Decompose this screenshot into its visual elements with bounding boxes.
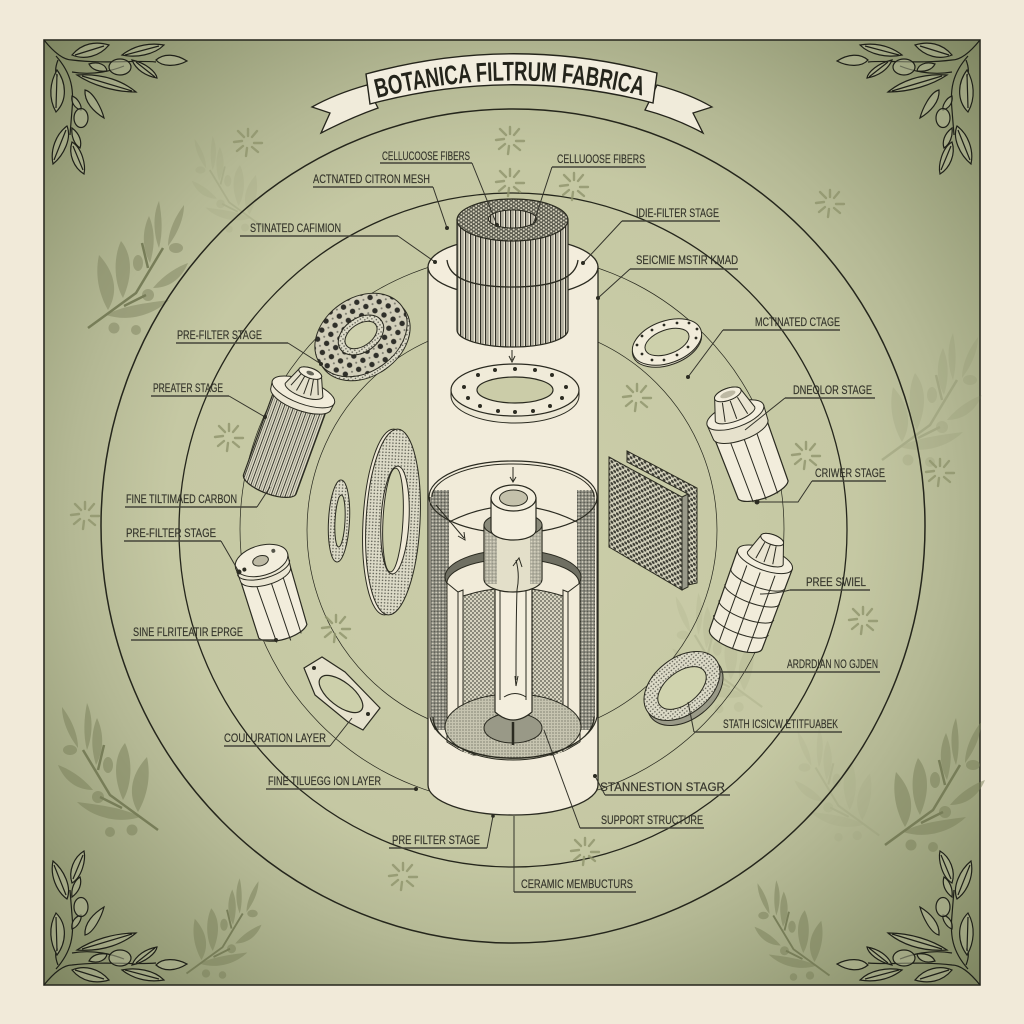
perforated flange <box>451 364 579 423</box>
corner olive branch: top left <box>44 40 187 174</box>
callout: pree swiel <box>760 575 870 594</box>
callout: ceramic membuctures: CERAMIC MEMBUCTURS <box>521 877 633 891</box>
callout: preater stage <box>151 381 267 419</box>
mesh floor <box>445 694 581 760</box>
callout: dneolor stage <box>745 383 875 430</box>
pleat body <box>457 220 568 347</box>
callout: dneolor stage: DNEOLOR STAGE <box>793 383 872 397</box>
sealing band <box>447 260 578 287</box>
callout: idle-filter stage <box>581 206 720 265</box>
callout: fine filtration layer: FINE TILUEGG ION LAYER <box>268 774 381 788</box>
title banner <box>310 53 714 134</box>
grid cartridge right <box>705 525 801 658</box>
callout: cellulose fibers left <box>380 149 499 227</box>
pleated cartridge left <box>235 357 343 505</box>
housing top rim <box>428 237 598 297</box>
callout: preater stage: PREATER STAGE <box>153 381 223 395</box>
inner mesh wall <box>463 588 563 755</box>
callout: coulfiration layer <box>224 718 352 746</box>
perforated dark disc <box>299 276 426 398</box>
banner right tail <box>645 85 712 133</box>
callout: support structure: SUPPORT STRUCTURE <box>601 813 703 827</box>
thin ring left <box>326 480 352 562</box>
callout: pre-filter stage upper: PRE-FILTER STAGE <box>177 328 262 342</box>
cream cartridge lower left <box>231 539 311 650</box>
callout: cellulose fibers right <box>533 152 646 225</box>
pleated activated-carbon cartridge <box>447 199 578 362</box>
banner left tail <box>312 85 378 133</box>
pleat top face <box>457 199 568 241</box>
large textured ring <box>358 428 425 616</box>
hatched wall strips <box>431 490 449 730</box>
collar sleeve <box>484 525 542 592</box>
callout: criwer stage <box>754 466 886 504</box>
callout: stath icsicw etitfuabek <box>688 702 842 732</box>
callout: stath icsicw etitfuabek: STATH ICSICW ETITFUABEK <box>723 717 838 731</box>
corner olive branch: top right <box>837 40 980 174</box>
callout: seicmie mstir kmad: SEICMIE MSTIR KMAD <box>636 253 738 267</box>
concentric guide circles <box>101 109 925 943</box>
thick ring right <box>631 637 736 740</box>
callout: cellulose fibers right: CELLUOOSE FIBERS <box>557 152 645 166</box>
callout: fine filtered carbon <box>125 487 270 507</box>
callout: mctinated ctage <box>686 315 840 379</box>
callout: mctinated ctage: MCTINATED CTAGE <box>755 315 840 329</box>
flange ring right <box>626 310 708 376</box>
clear center tube <box>495 585 532 720</box>
callout: fine filtered carbon: FINE TILTIMAED CARBON <box>126 492 237 506</box>
inner cartridge side panels <box>447 583 463 752</box>
cutaway window <box>431 490 595 760</box>
callout: coulfiration layer: COULURATION LAYER <box>224 731 326 745</box>
callout: stannestion stagr <box>593 774 730 795</box>
corner olive branch: bottom left <box>44 851 187 985</box>
upper tube <box>491 498 536 540</box>
cream cartridge right <box>698 378 794 510</box>
callout: ardrdian no gjden: ARDRDIAN NO GJDEN <box>787 657 878 671</box>
callout: pre-filter stage upper <box>176 328 323 366</box>
window rim bottom <box>430 717 597 758</box>
callout: ceramic membuctures <box>514 816 636 892</box>
center hole <box>488 210 536 228</box>
callout: activated citron mesh: ACTNATED CITRON MESH <box>313 172 430 186</box>
dark base disc <box>484 713 542 743</box>
callout labels and leaders <box>124 149 886 892</box>
ghost botanical sprigs <box>58 136 985 981</box>
flow arrows <box>436 467 522 686</box>
callout: pre-filter stage lower <box>124 526 242 574</box>
callout: stinated cafimion <box>240 221 437 264</box>
gasket plate <box>304 657 380 730</box>
callout: sine filtration edge: SINE FLRITEATIR EPRGE <box>133 625 243 639</box>
inner cartridge collar band <box>444 552 582 584</box>
central filter housing <box>428 237 598 815</box>
callout: stannestion stagr: STANNESTION STAGR <box>600 780 725 794</box>
decorative sparkle stars <box>71 127 954 890</box>
callout: seicmie mstir kmad <box>596 253 738 300</box>
banner main band <box>366 54 657 104</box>
callout: pre filter stage bottom: PRE FILTER STAGE <box>392 833 480 847</box>
callout: stinated cafimion: STINATED CAFIMION <box>250 221 341 235</box>
title text: BOTANICA FILTRUM FABRICA <box>374 62 642 98</box>
window rim top <box>429 461 597 533</box>
corner olive branch: bottom right <box>837 851 980 985</box>
callout: idle-filter stage: IDIE-FILTER STAGE <box>636 206 719 220</box>
callout: pree swiel: PREE SWIEL <box>806 575 866 589</box>
callout: cellulose fibers left: CELLUCOOSE FIBERS <box>382 149 470 163</box>
callout: pre-filter stage lower: PRE-FILTER STAGE <box>126 526 216 540</box>
dotted filter panels <box>609 451 697 590</box>
callout: support structure <box>544 730 704 828</box>
housing body <box>428 267 598 815</box>
callout: activated citron mesh <box>313 172 449 230</box>
callout: pre filter stage bottom <box>389 814 495 848</box>
callout: criwer stage: CRIWER STAGE <box>815 466 885 480</box>
